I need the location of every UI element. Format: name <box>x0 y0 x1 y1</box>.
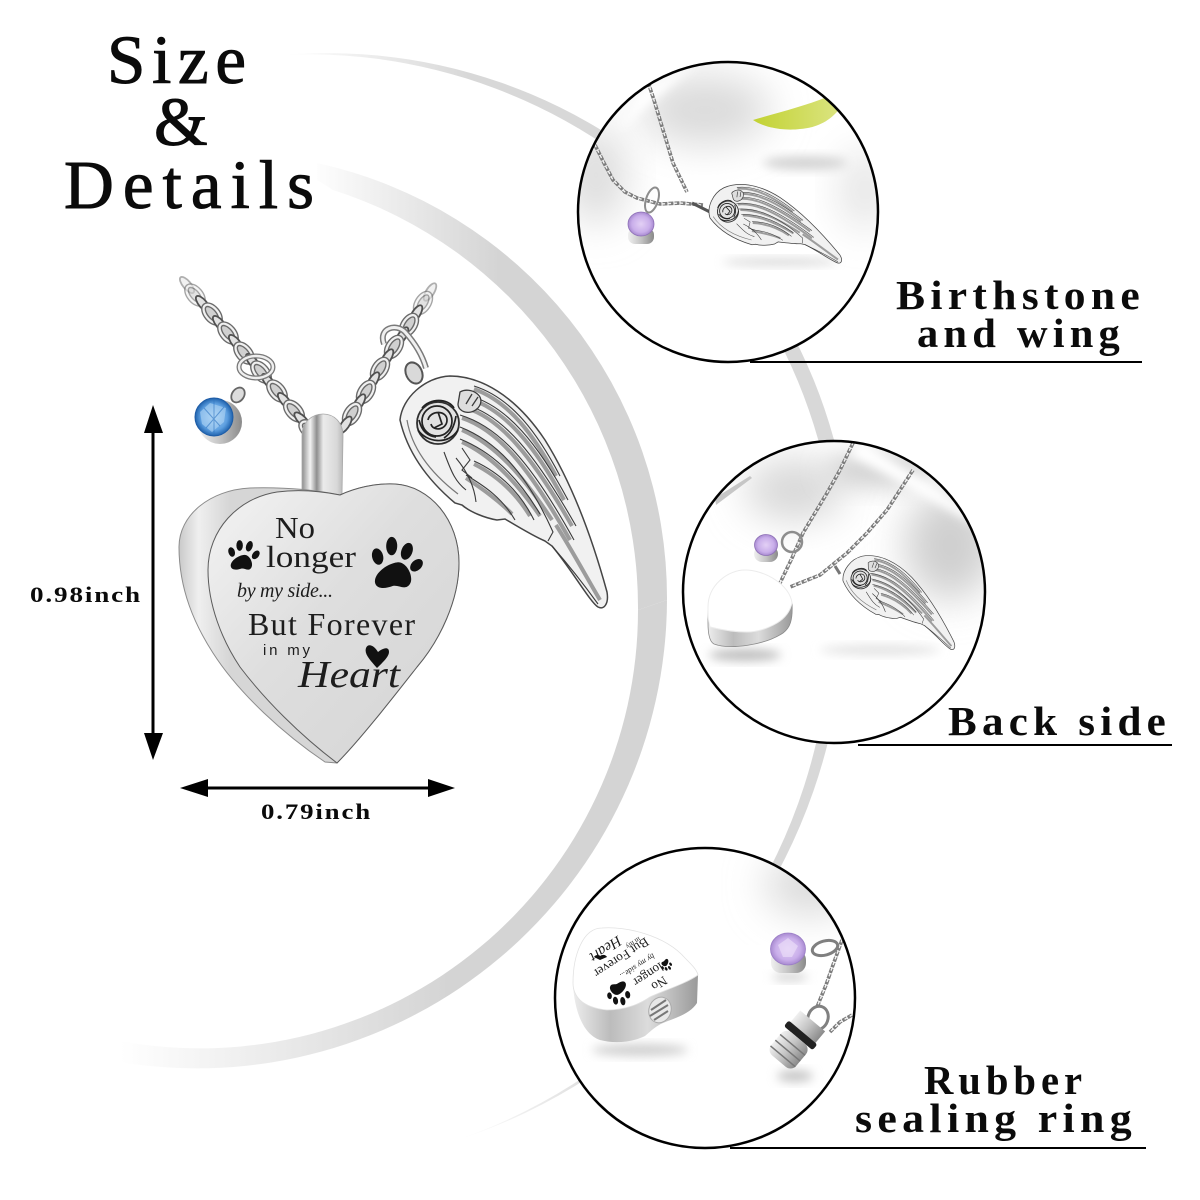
angel wing charm <box>400 376 607 608</box>
icon: large paw <box>366 534 428 592</box>
engraved inscription <box>237 510 415 696</box>
title: Details <box>64 147 314 223</box>
background crescent: inner large arc <box>120 163 667 1068</box>
engraved inscription, rotated: But Forever <box>591 934 652 981</box>
heart body <box>179 484 459 763</box>
arrow: vertical dimension <box>144 405 163 760</box>
engraved inscription: But Forever <box>248 606 415 642</box>
engraved inscription: in my <box>263 642 310 659</box>
title <box>64 22 314 223</box>
icon: green leaf <box>753 98 838 130</box>
background crescent: outer thin arc <box>283 53 853 1140</box>
soft studio shading <box>566 60 890 230</box>
engraved inscription: Heart <box>297 654 402 696</box>
chain <box>595 82 703 205</box>
engraved inscription: No <box>275 510 315 545</box>
icon: purple birthstone <box>754 532 802 562</box>
angel wing <box>842 555 956 650</box>
main necklace with heart pendant <box>178 275 607 763</box>
underline: birthstone and wing <box>750 361 1142 363</box>
caption: birthstone and wing <box>896 272 1145 356</box>
icon: paws and heart <box>594 955 674 1008</box>
chain <box>780 443 913 587</box>
icon: small heart <box>366 645 389 668</box>
engraved inscription: longer <box>266 539 357 574</box>
underline: rubber sealing ring <box>730 1147 1146 1149</box>
angel wing <box>708 184 842 264</box>
engraved inscription, rotated: No <box>649 973 670 994</box>
icon: purple birthstone <box>770 933 839 973</box>
engraved inscription, rotated: by my side... <box>618 951 656 981</box>
right chain <box>336 281 439 435</box>
dimension label: width: 0.79inch <box>261 799 372 824</box>
plain heart pendant back <box>708 570 792 647</box>
left chain <box>178 275 322 442</box>
caption: back side: Back side <box>948 698 1171 744</box>
caption: rubber sealing ring <box>855 1057 1137 1141</box>
screw plug with rubber sealing ring <box>770 1004 830 1068</box>
engraved inscription, rotated: in my <box>624 935 642 951</box>
icon: blue birthstone <box>195 356 273 444</box>
icon: small paw <box>224 537 263 573</box>
title: & <box>154 84 208 160</box>
soft studio shading <box>592 855 855 1082</box>
arrow: horizontal dimension <box>180 779 455 797</box>
heart pendant lying on side <box>573 928 698 1042</box>
heart front face <box>208 484 459 763</box>
engraved inscription, rotated: Heart <box>585 932 625 965</box>
dimension label: height: 0.98inch <box>30 582 142 607</box>
caption: rubber sealing ring: Rubber <box>924 1057 1087 1103</box>
bail <box>302 414 343 499</box>
panel: rubber sealing ring circle <box>555 848 855 1148</box>
engraved inscription: by my side... <box>237 580 333 602</box>
caption: birthstone and wing: Birthstone <box>896 272 1145 318</box>
engraved inscription, rotated: longer <box>630 959 666 990</box>
jump ring for wing <box>383 328 426 386</box>
icon: purple birthstone <box>628 186 710 244</box>
chain <box>817 940 852 1032</box>
title: Size <box>107 22 246 98</box>
underline: back side <box>858 744 1172 746</box>
caption: rubber sealing ring: sealing ring <box>855 1095 1137 1141</box>
panel: back side circle <box>683 440 995 743</box>
soft studio shading <box>709 440 995 661</box>
panel: birthstone and wing circle <box>566 60 890 362</box>
caption: birthstone and wing: and wing <box>917 310 1125 356</box>
engraved inscription, rotated <box>589 935 668 988</box>
